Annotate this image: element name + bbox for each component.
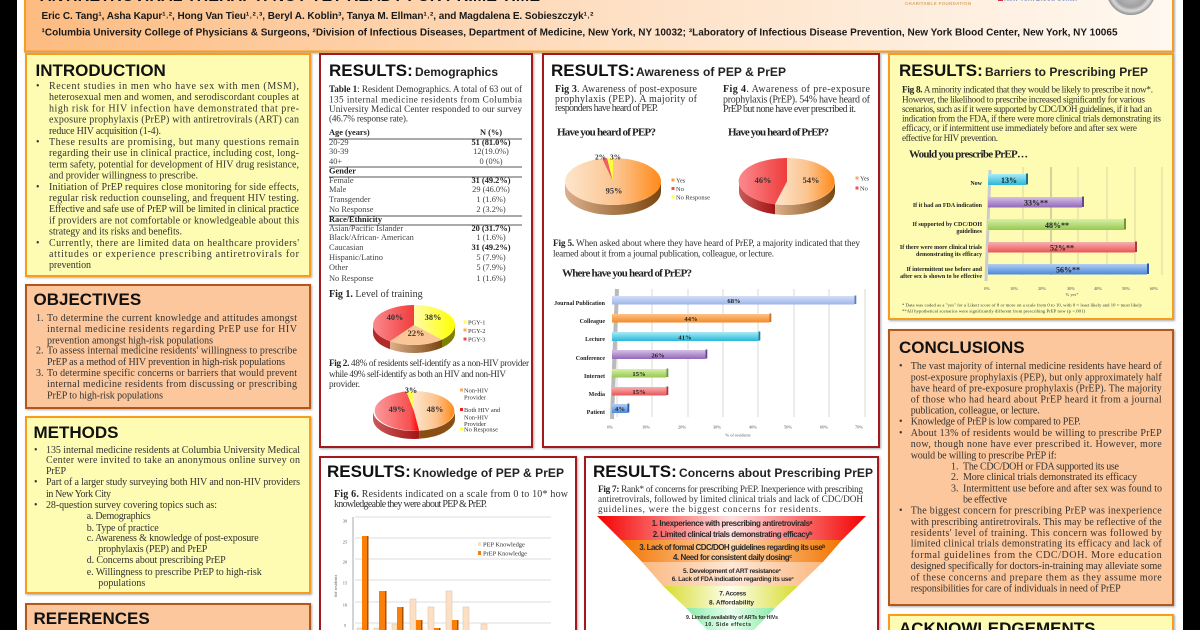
demographics table: 20-29	[329, 138, 349, 147]
bullets: Part of a larger study surveying both HIV and non-HIV providers	[46, 477, 300, 488]
numbered list: prevention amongst high-risk populations	[47, 335, 213, 346]
pie chart: provider type: 49%	[389, 405, 405, 414]
bar chart: where heard of PrEP: 26%	[651, 352, 665, 360]
heading: Awareness of PEP & PrEP	[636, 65, 786, 79]
conclusion text: The biggest concern for prescribing PrEP was inexperience	[911, 506, 1162, 517]
panel: methods	[26, 417, 310, 593]
funnel diagram: 8. Affordability	[709, 600, 754, 606]
funnel diagram: c	[789, 554, 792, 560]
fig 6 caption	[334, 489, 569, 510]
conclusion text: 2.	[951, 472, 958, 483]
bullets: regular risk reduction counseling, and frequent HIV testing.	[49, 193, 299, 204]
pie chart: heard of PrEP: 46%	[755, 176, 771, 185]
pie chart: heard of PEP: 95%	[606, 186, 622, 196]
bar chart: where heard of PrEP: 30%	[713, 424, 721, 430]
bullets: d. Concerns about prescribing PrEP	[87, 555, 226, 566]
funnel diagram: 9. Limited availability of ARTs for HIVs	[686, 615, 778, 621]
pie chart: heard of PrEP	[728, 126, 870, 215]
bullets: if providers are not comfortable or knowledgeable about this	[49, 215, 299, 226]
heading: RESULTS:	[329, 61, 413, 80]
fig 3 caption: responders have heard of PEP.	[555, 103, 658, 114]
legend: Non-HIV	[464, 388, 489, 394]
demographics table: 1 (1.6%)	[476, 195, 506, 204]
bar chart: where heard of PrEP: Internet	[584, 374, 605, 380]
demographics table: N (%)	[480, 128, 502, 137]
authors: Eric C. Tang¹, Asha Kapur¹˒², Hong Van Tieu¹˒²˒³, Beryl A. Koblin³, Tanya M. Ellman¹˒², and Magdalena E. Sobieszczyk¹˒²	[42, 11, 594, 22]
heading	[551, 61, 786, 80]
demographics table: 1 (1.6%)	[476, 233, 506, 242]
footnotes: * Data was coded as a "yes" for a Likert score of 8 or more on a scale from 0 to 10, with 0 = least likely and 10 = most likely	[902, 302, 1143, 308]
legend: Provider	[464, 421, 487, 428]
bullets: •	[34, 445, 38, 456]
fig 3 caption: Fig 3. Awareness of post-exposure	[555, 84, 698, 95]
bullets: heterosexual men and women, and serodiscordant couples at	[49, 92, 299, 103]
bar chart: knowledge: 25	[343, 540, 348, 544]
demographics table: Other	[329, 263, 348, 272]
fig 5 caption: learned about it from a journal publication, colleague, or lecture.	[553, 248, 774, 258]
bar chart: where heard of PrEP: 10%	[642, 424, 650, 430]
numbered list: PrEP to high-risk populations	[47, 390, 163, 401]
legend	[672, 178, 710, 202]
bullets: PrEP	[46, 466, 66, 477]
bullets: •	[36, 81, 40, 92]
bullets: in New York City	[46, 489, 111, 500]
legend: No Response	[676, 194, 710, 202]
bullets: •	[36, 182, 40, 193]
heading: Demographics	[415, 65, 498, 79]
conclusion text: now, though none have ever prescribed it. However, more	[911, 439, 1162, 450]
table caption	[329, 84, 523, 124]
bar chart: where heard of PrEP: Journal Publication	[554, 301, 606, 307]
bullets: exposure prophylaxis (PrEP) with antiretrovirals (ART) can	[49, 115, 299, 126]
legend	[478, 542, 527, 558]
funnel diagram: 10. Side effects	[705, 622, 751, 628]
numbered list: internal medicine residents regarding PrEP use for HIV	[47, 324, 298, 335]
left black side bar	[0, 0, 17, 630]
bar chart: where heard of PrEP: 0%	[607, 424, 613, 430]
fig 2 caption: while 49% self-identify as both an HIV and non-HIV	[329, 369, 506, 379]
conclusion text: responsibilities for care of individuals in need of PrEP	[911, 583, 1121, 594]
funnel diagram: 2. Limited clinical trials demonstrating efficacy	[653, 530, 810, 539]
demographics table: Caucasian	[329, 243, 364, 252]
header banner	[25, 0, 1173, 52]
bullets: These results are promising, but many questions remain	[49, 137, 299, 148]
demographics table: 5 (7.9%)	[476, 263, 506, 272]
fig 2 caption: Fig 2. 48% of residents self-identify as a non-HIV provider	[329, 358, 529, 368]
bullets: term safety, potential for development of HIV drug resistance,	[49, 159, 299, 170]
legend: No	[860, 186, 868, 192]
fig 3 caption: prophylaxis (PEP). A majority of	[555, 94, 698, 105]
bullets: Recent studies in men who have sex with men (MSM),	[49, 81, 299, 92]
bullets: e. Willingness to prescribe PrEP to high-risk	[87, 567, 262, 578]
bullets: •	[36, 137, 40, 148]
numbered list: To assess internal medicine residents' willingness to prescribe	[47, 346, 298, 357]
table caption: (46.7% response rate).	[329, 114, 408, 124]
fig 8 caption	[902, 84, 1161, 143]
pie chart: provider type: 48%	[427, 405, 443, 414]
panel: conclusions	[889, 330, 1173, 605]
demographics table: 51 (81.0%)	[471, 138, 511, 147]
bar chart: would you prescribe PrEP: 48%**	[1045, 221, 1069, 230]
bar chart: where heard of PrEP	[554, 289, 865, 438]
bar chart: would you prescribe PrEP: 60%	[1150, 286, 1158, 291]
fig 4 caption	[723, 84, 871, 115]
funnel diagram: c	[779, 567, 782, 572]
legend: No	[676, 186, 684, 193]
bar chart: would you prescribe PrEP: If supported by CDC/DOH	[912, 222, 982, 228]
bar chart: where heard of PrEP: 70%	[855, 424, 863, 430]
demographics table: Age (years)	[329, 128, 370, 137]
numbered list: PrEP as a method of HIV prevention in high-risk populations	[47, 357, 285, 368]
bar chart: knowledge: 20	[343, 560, 348, 564]
fig 6 caption: Fig 6. Residents indicated on a scale from 0 to 10* how	[334, 489, 569, 500]
affiliations: ¹Columbia University College of Physicians & Surgeons, ²Division of Infectious Diseases, Department of Medicine, New York, NY 10032; ³Laboratory of Infectious Disease Prevention, New York Blood Center, New York, NY 10065	[42, 28, 1118, 38]
bullets: regarding their use in clinical practice, including cost, long-	[49, 148, 299, 159]
heading	[327, 462, 564, 481]
legend: PGY-2	[468, 328, 485, 335]
bar chart: where heard of PrEP: % of residents	[725, 432, 751, 438]
bullets: a. Demographics	[87, 511, 151, 522]
bar chart: would you prescribe PrEP: 52%**	[1050, 244, 1074, 252]
numbered list: To determine specific concerns or barriers that would prevent	[47, 368, 297, 379]
conclusion text: post-exposure prophylaxis (PEP), but only approximately half	[911, 372, 1162, 384]
legend: Both HIV and	[464, 407, 501, 414]
funnel diagram: b	[809, 531, 812, 537]
bullets: 135 internal medicine residents at Columbia University Medical	[46, 445, 300, 456]
heading: CONCLUSIONS	[899, 338, 1025, 357]
bar chart: where heard of PrEP: 4%	[615, 406, 625, 413]
bar chart: where heard of PrEP: 20%	[678, 424, 686, 430]
fig 7 caption: Fig 7: Rank* of concerns for prescribing PrEP. Inexperience with prescribing	[598, 484, 863, 494]
bar chart: would you prescribe PrEP: guidelines	[956, 229, 983, 235]
funnel diagram: 3. Lack of formal CDC/DOH guidelines regarding its use	[639, 543, 823, 552]
funnel diagram: b	[822, 544, 825, 550]
conclusion text: About 13% of residents would be willing to prescribe PrEP	[911, 428, 1162, 439]
fig 5 caption	[553, 238, 860, 258]
bar chart: would you prescribe PrEP: % yes*	[1066, 292, 1078, 297]
legend: Provider	[464, 394, 487, 402]
demographics table: Asian/Pacific Islander	[329, 224, 403, 233]
demographics table: 1 (1.6%)	[476, 274, 506, 283]
conclusion text: would be willing to prescribe PrEP if:	[911, 450, 1057, 461]
conclusion text: have heard of pre-exposure prophylaxis (PrEP). The majority	[911, 384, 1162, 395]
numbered list: 3.	[36, 368, 44, 379]
legend	[460, 388, 501, 434]
legend: PGY-3	[468, 336, 485, 344]
bar chart: knowledge: 5	[344, 623, 347, 628]
right black side bar	[1183, 0, 1200, 630]
bar chart: would you prescribe PrEP: If there were more clinical trials	[900, 245, 983, 251]
fig 8 caption: Fig 8. A minority indicated that they would be likely to prescribe it now*.	[902, 84, 1153, 94]
heading	[593, 462, 873, 481]
demographics table: 29 (46.0%)	[472, 185, 510, 194]
demographics table: Black/African- American	[329, 233, 415, 242]
bar chart: where heard of PrEP: 41%	[678, 334, 692, 342]
logo: university seal	[1107, 0, 1155, 14]
heading: Barriers to Prescribing PrEP	[985, 65, 1148, 79]
conclusion text: •	[899, 361, 903, 372]
bullets: prophylaxis (PEP) and PrEP	[98, 544, 208, 555]
bullets: •	[34, 500, 38, 511]
bar chart: where heard of PrEP: Conference	[576, 356, 605, 362]
funnel diagram: 6. Lack of FDA indication regarding its use	[672, 576, 792, 583]
heading: RESULTS:	[327, 462, 411, 481]
panel: results awareness	[543, 54, 879, 447]
demographics table: Race/Ethnicity	[329, 215, 383, 224]
bullets: and provider willingness to prescribe.	[49, 171, 198, 182]
fig 7 caption: guidelines, were the biggest concerns for residents.	[598, 504, 821, 514]
numbered list: 1.	[36, 313, 44, 324]
bullets: •	[36, 238, 40, 249]
heading: RESULTS:	[899, 61, 983, 80]
pie chart: heard of PEP: 2%	[595, 152, 606, 162]
bullets: Center were invited to take an anonymous online survey on	[46, 455, 300, 466]
conclusion text: residents' level of training. This concern was followed by	[911, 528, 1162, 539]
heading: RESULTS:	[593, 462, 677, 481]
bullets: strategy and its risks and benefits.	[49, 227, 182, 238]
pie chart: level of training: 38%	[425, 313, 441, 322]
demographics table	[329, 128, 522, 283]
heading: Concerns about Prescribing PrEP	[679, 466, 873, 480]
pie chart: heard of PrEP: 54%	[803, 176, 819, 185]
table caption: University Medical Center responded to our survey	[329, 104, 522, 114]
demographics table: No Response	[329, 274, 374, 283]
bullets: high risk for HIV infection have demonstrated that pre-	[49, 103, 299, 114]
funnel diagram: 1. Inexperience with prescribing antiretrovirals	[652, 519, 810, 528]
bullets: 28-question survey covering topics such as:	[46, 500, 217, 511]
bar chart: would you prescribe PrEP: If it had an FDA indication	[913, 203, 983, 209]
heading: METHODS	[34, 423, 118, 442]
fig 8 caption: indication from the FDA, if there were more clinical trials demonstrating its	[902, 113, 1161, 123]
fig 8 caption: effective for HIV prevention.	[902, 133, 998, 143]
funnel diagram	[597, 516, 866, 630]
bar chart: would you prescribe PrEP: 30%	[1067, 286, 1075, 291]
chart heading: Would you prescribe PrEP…	[909, 148, 1028, 160]
funnel diagram: 7. Access	[719, 590, 747, 598]
bullets: attitudes or experience prescribing antiretrovirals for	[49, 249, 300, 260]
fig 4 caption: PrEP but none have ever prescribed it.	[723, 104, 856, 115]
legend	[856, 176, 870, 192]
fig 8 caption: scenarios, such as if it were supported by CDC/DOH guidelines, if it had an	[902, 104, 1152, 114]
legend: No Response	[464, 426, 498, 434]
panel: results demographics	[320, 54, 532, 447]
conclusion text: •	[899, 428, 903, 439]
bar chart: would you prescribe PrEP: 0%	[984, 286, 990, 291]
pie chart: heard of PEP	[557, 126, 710, 215]
bar chart: would you prescribe PrEP: after sex is shown to be effective	[900, 274, 982, 280]
conclusion text: Intermittent use before and after sex was found to	[963, 483, 1162, 494]
numbered list	[36, 313, 298, 401]
demographics table: 12(19.0%)	[473, 147, 509, 156]
bullets	[36, 81, 300, 271]
panel: objectives	[26, 285, 310, 408]
conclusion text: •	[899, 506, 903, 517]
demographics table: Transgender	[329, 195, 371, 204]
demographics table: Gender	[329, 166, 356, 176]
fig 5 caption: Fig 5. When asked about where they have heard of PrEP, a majority indicated that they	[553, 238, 860, 248]
conclusion text: 3.	[951, 483, 958, 494]
fig 8 caption: efficacy, or if intermittent use immediately before and after sex were	[902, 123, 1137, 133]
numbered list: internal medicine residents from discussing or prescribing	[47, 379, 297, 390]
bar chart: would you prescribe PrEP: demonstrating its efficacy	[916, 252, 982, 258]
fig 2 caption	[329, 358, 529, 389]
bullets	[34, 445, 300, 589]
panel: results concerns	[585, 457, 878, 630]
footnotes: **All hypothetical scenarios were significantly different from prescribing PrEP now (p <.001)	[902, 308, 1085, 314]
bar chart: would you prescribe PrEP: 33%**	[1024, 198, 1048, 208]
bar chart: would you prescribe PrEP: 40%	[1094, 286, 1102, 291]
conclusion text: limited clinical trials demonstrating its efficacy and lack of	[911, 539, 1162, 550]
conclusion text: designed specifically for doctors-in-training may alleviate some	[911, 561, 1162, 572]
bar chart: where heard of PrEP: 50%	[784, 424, 792, 430]
fig 7 caption	[598, 484, 863, 514]
panel: references	[26, 604, 310, 630]
table caption: Table 1: Resident Demographics. A total of 63 out of	[329, 84, 523, 94]
conclusion text: The vast majority of internal medicine residents have heard of	[911, 361, 1162, 372]
bar chart: where heard of PrEP: Media	[589, 392, 605, 398]
panel: results knowledge	[320, 457, 576, 630]
fig 1 caption: Fig 1. Level of training	[329, 289, 423, 300]
funnel diagram: 4. Need for consistent daily dosing	[673, 553, 790, 562]
demographics table: Hispanic/Latino	[329, 253, 383, 262]
heading: Knowledge of PEP & PrEP	[413, 466, 564, 480]
pie chart: heard of PEP: Have you heard of PEP?	[557, 126, 656, 138]
heading	[899, 61, 1148, 80]
pie chart: provider type	[373, 386, 501, 439]
funnel diagram: c	[791, 575, 794, 580]
bar chart: where heard of PrEP: Lecture	[585, 337, 605, 343]
bar chart: knowledge: #of residents	[333, 574, 338, 597]
bullets: Effective and safe use of PrEP will be limited in clinical practice	[49, 204, 300, 215]
panel: acknowledgements	[889, 615, 1173, 630]
bar chart: knowledge: 15	[343, 580, 348, 586]
conclusion text: of those who had heard about PrEP heard it from a journal	[911, 394, 1162, 405]
legend: PGY-1	[468, 320, 485, 326]
legend: PrEP Knowledge	[483, 550, 527, 558]
numbered list: 2.	[36, 346, 44, 357]
conclusion text: •	[899, 417, 903, 428]
bar chart: knowledge	[333, 517, 551, 630]
demographics table: Male	[329, 185, 346, 194]
heading: RESULTS:	[551, 61, 635, 80]
bullets: Initiation of PrEP requires close monitoring for side effects,	[49, 182, 299, 193]
bar chart: where heard of PrEP: Colleague	[580, 319, 605, 325]
legend: Non-HIV	[464, 414, 489, 422]
heading: INTRODUCTION	[36, 61, 166, 80]
conclusion text: publication, colleague, or lecture.	[911, 405, 1040, 416]
bullets: reduce HIV acquisition (1-4).	[49, 126, 161, 137]
bar chart: would you prescribe PrEP	[900, 167, 1162, 297]
demographics table: 5 (7.9%)	[476, 253, 506, 262]
pie chart: heard of PrEP: Have you heard of PrEP?	[728, 126, 829, 138]
bar chart: where heard of PrEP: 15%	[632, 371, 646, 378]
legend: Yes	[860, 176, 870, 182]
conclusion text: of these concerns and prepare them as they assume more	[911, 572, 1162, 583]
fig 7 caption: antiretrovirals, followed by limited clinical trials and lack of CDC/DOH	[598, 494, 863, 504]
logo: charitable foundation: CHARITABLE FOUNDATION	[905, 1, 971, 6]
conclusion text: Knowledge of PrEP is low compared to PEP.	[911, 417, 1081, 428]
funnel diagram: a	[810, 520, 813, 526]
panel: introduction	[26, 54, 310, 276]
heading	[329, 61, 498, 80]
demographics table: 2 (3.2%)	[476, 205, 506, 214]
table caption: 135 internal medicine residents from Columbia	[329, 94, 522, 104]
bar chart: where heard of PrEP: 60%	[820, 424, 828, 430]
conclusion text: 1.	[951, 462, 958, 473]
bar chart: knowledge: 30	[343, 518, 348, 524]
conclusion text: The CDC/DOH or FDA supported its use	[963, 462, 1120, 473]
demographics table: 20 (31.7%)	[471, 224, 511, 233]
panel: results barriers	[889, 54, 1173, 319]
conclusion text: More clinical trials demonstrated its efficacy	[963, 472, 1137, 483]
pie chart: level of training: 22%	[408, 329, 424, 338]
pie chart: provider type: 3%	[405, 386, 417, 395]
bar chart: would you prescribe PrEP: 56%**	[1056, 266, 1080, 274]
pie chart: level of training	[373, 305, 485, 353]
bullets: b. Type of practice	[87, 523, 159, 534]
fig 4 caption: prophylaxis (PrEP). 54% have heard of	[723, 95, 871, 106]
bullets: c. Awareness & knowledge of post-exposure	[87, 533, 259, 544]
legend: PEP Knowledge	[483, 542, 525, 548]
bullets: prevention	[49, 260, 91, 271]
bar chart: where heard of PrEP: 44%	[684, 316, 698, 323]
demographics table: 40+	[329, 157, 342, 166]
numbered list: To determine the current knowledge and attitudes amongst	[47, 313, 297, 324]
bar chart: where heard of PrEP: 68%	[727, 298, 741, 305]
demographics table: No Response	[329, 205, 374, 214]
bar chart: would you prescribe PrEP: If intermittent use before and	[906, 267, 983, 273]
chart heading: Where have you heard of PrEP?	[562, 268, 692, 280]
heading: REFERENCES	[34, 609, 150, 628]
conclusion text	[899, 361, 1162, 594]
conclusion text: with prescribing antiretrovirals. This may be reflective of the	[911, 517, 1162, 528]
footnotes	[902, 302, 1143, 314]
fig 3 caption	[555, 84, 698, 114]
bar chart: where heard of PrEP: 15%	[632, 389, 646, 396]
bar chart: would you prescribe PrEP: 10%	[1010, 286, 1018, 291]
demographics table: 0 (0%)	[479, 157, 503, 166]
demographics table: 31 (49.2%)	[471, 243, 511, 252]
fig 4 caption: Fig 4. Awareness of pre-exposure	[723, 84, 871, 95]
bullets: •	[34, 477, 38, 488]
legend: Yes	[676, 178, 686, 184]
fig 8 caption: However, the likelihood to prescribe increased significantly for various	[902, 94, 1145, 104]
conclusion text: formal guidelines from the CDC/DOH. More education	[911, 550, 1162, 561]
pie chart: heard of PEP: 3%	[610, 152, 621, 162]
bar chart: where heard of PrEP: 40%	[749, 424, 757, 430]
fig 2 caption: provider.	[329, 379, 360, 389]
bar chart: would you prescribe PrEP: Now	[970, 181, 983, 187]
legend	[464, 320, 485, 344]
bullets: populations	[98, 578, 145, 589]
demographics table: Female	[329, 176, 354, 185]
fig 6 caption: knowledgeable they were about PEP & PrEP.	[334, 499, 487, 510]
bullets: Currently, there are limited data on healthcare providers'	[49, 238, 299, 249]
bar chart: would you prescribe PrEP: 50%	[1122, 286, 1130, 291]
bar chart: knowledge: 10	[343, 602, 348, 608]
conclusion text: be effective	[963, 494, 1008, 505]
bar chart: where heard of PrEP: Patient	[587, 410, 605, 416]
demographics table: 30-39	[329, 147, 349, 156]
funnel diagram: 5. Development of ART resistance	[683, 568, 779, 575]
demographics table: 31 (49.2%)	[471, 176, 511, 185]
bar chart: would you prescribe PrEP: 20%	[1038, 286, 1046, 291]
pie chart: level of training: 40%	[387, 313, 403, 322]
bar chart: would you prescribe PrEP: 13%	[1001, 176, 1017, 185]
heading: OBJECTIVES	[34, 290, 141, 309]
